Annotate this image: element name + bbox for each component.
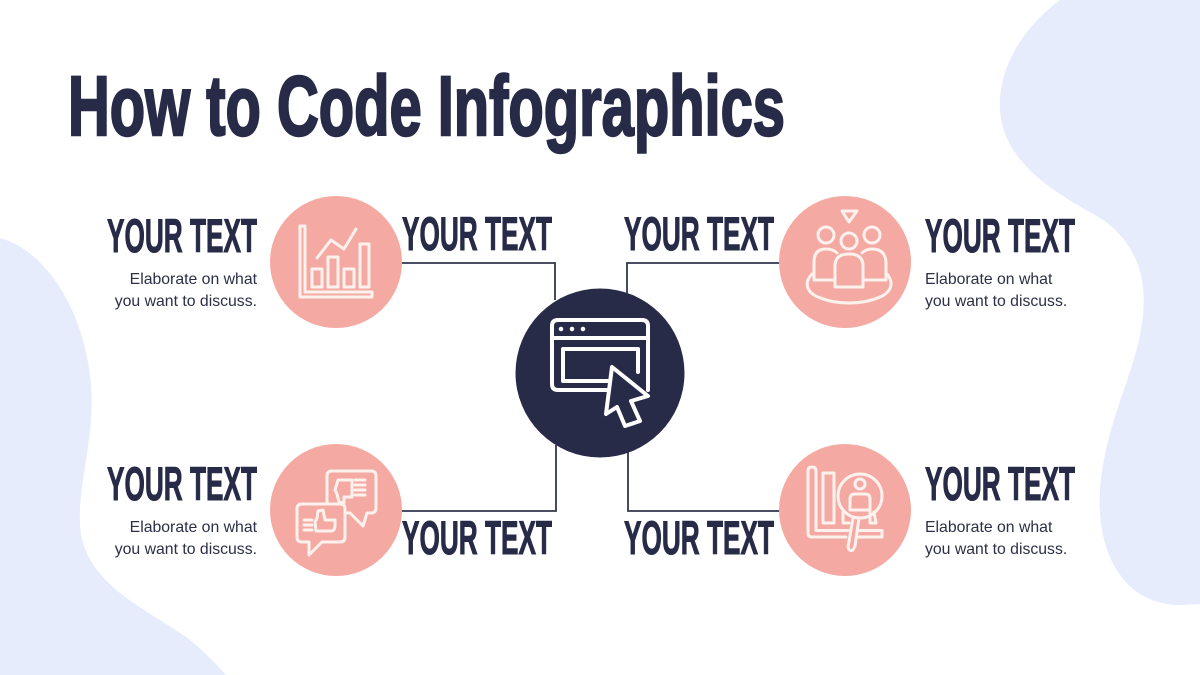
- heading: YOUR TEXT: [107, 209, 257, 262]
- panel: top left: [107, 196, 402, 328]
- connector lines: [402, 263, 780, 511]
- background blob: top right: [1000, 0, 1200, 605]
- panel: bottom left: [107, 444, 402, 576]
- description: you want to discuss.: [925, 293, 1067, 310]
- description: you want to discuss.: [115, 293, 257, 310]
- pink circle with people icon: [779, 196, 911, 328]
- description: you want to discuss.: [925, 541, 1067, 558]
- pink circle with thumbs icon: [270, 444, 402, 576]
- description: Elaborate on what: [925, 519, 1053, 536]
- panel: top right: [779, 196, 1075, 328]
- icon: magnifier over chart: [808, 467, 882, 551]
- icon: audience group: [807, 211, 891, 303]
- icon: browser window and cursor: [552, 320, 648, 426]
- heading: YOUR TEXT: [107, 457, 257, 510]
- heading: YOUR TEXT: [925, 209, 1075, 262]
- icon: bar chart: [300, 226, 372, 297]
- icon: speech bubbles with thumbs: [297, 471, 376, 555]
- description: Elaborate on what: [130, 271, 258, 288]
- description: you want to discuss.: [115, 541, 257, 558]
- connector label: bottom left: YOUR TEXT: [402, 511, 552, 564]
- connector label: top right: YOUR TEXT: [624, 207, 774, 260]
- heading: YOUR TEXT: [925, 457, 1075, 510]
- connector label: top left: YOUR TEXT: [402, 207, 552, 260]
- panel: bottom right: [779, 444, 1075, 576]
- connector label: bottom right: YOUR TEXT: [624, 511, 774, 564]
- description: Elaborate on what: [925, 271, 1053, 288]
- description: Elaborate on what: [130, 519, 258, 536]
- pink circle with chart icon: [270, 196, 402, 328]
- center circle with browser cursor icon: [516, 288, 684, 458]
- background blob: bottom left: [0, 238, 226, 675]
- title: How to Code Infographics: [68, 59, 785, 153]
- pink circle with search icon: [779, 444, 911, 576]
